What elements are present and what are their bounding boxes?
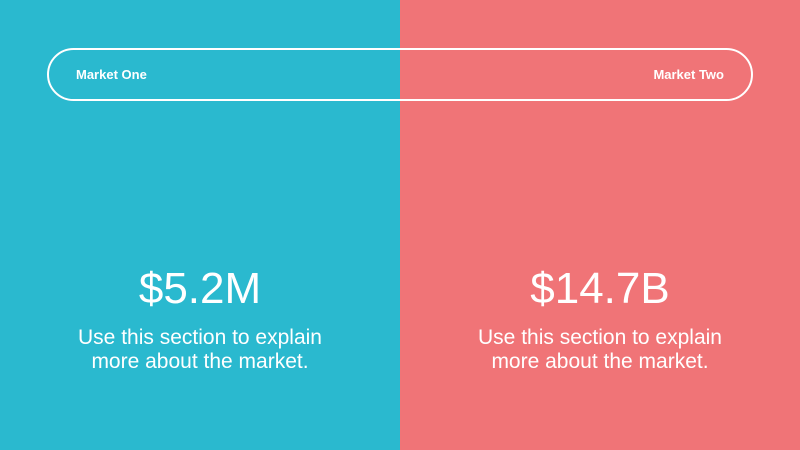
text: market one description <box>78 326 322 373</box>
text: market one description: Use this section to explain <box>78 326 322 349</box>
value: market two: $14.7B <box>530 264 670 313</box>
text: market two description: Use this section to explain <box>478 326 722 349</box>
panel: market two <box>400 0 800 450</box>
label: market one: Market One <box>76 67 147 82</box>
panel: market one <box>0 0 400 450</box>
text: market two description <box>478 326 722 373</box>
value: market one: $5.2M <box>139 264 261 313</box>
text: market one description: more about the market. <box>91 350 309 373</box>
pill header <box>47 48 753 101</box>
label: market two: Market Two <box>653 67 724 82</box>
text: market two description: more about the market. <box>491 350 709 373</box>
